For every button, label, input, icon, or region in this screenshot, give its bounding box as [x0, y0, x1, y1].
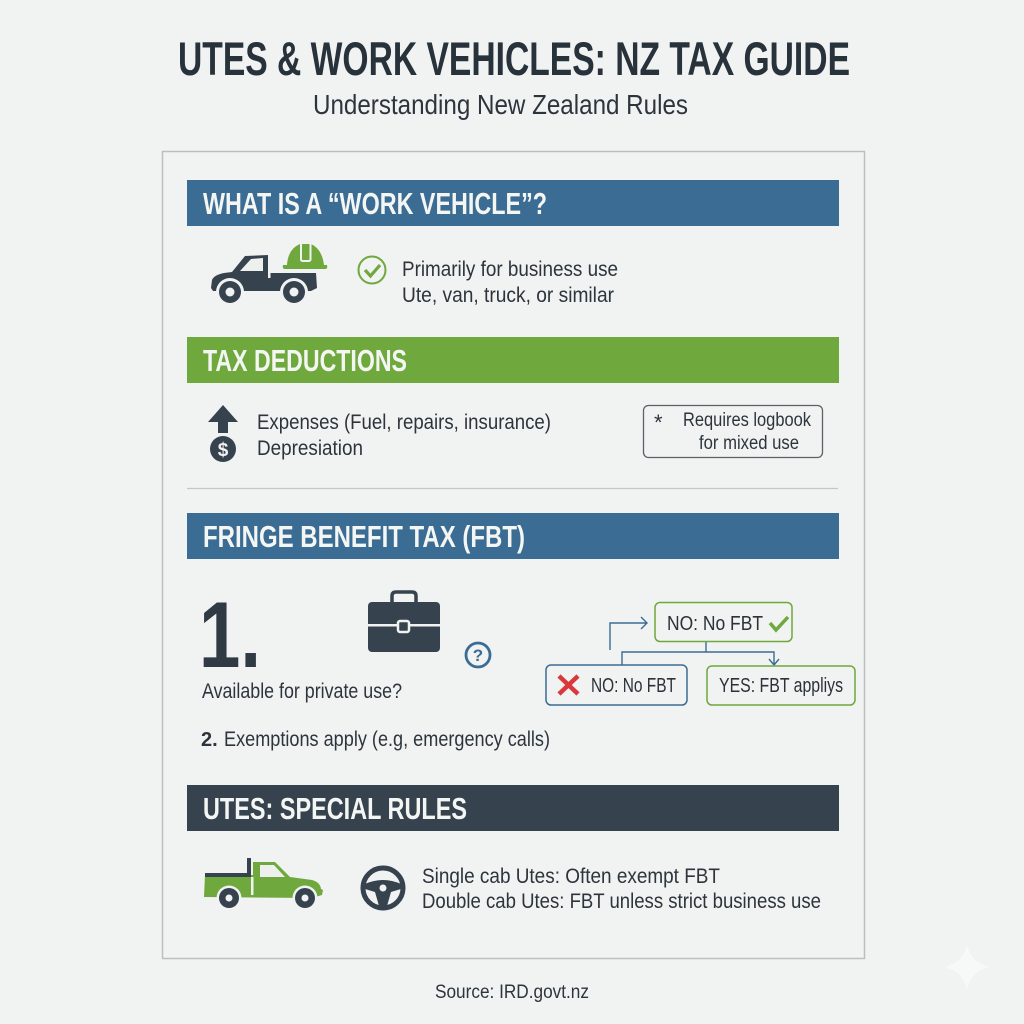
- panel: utes special rules: [187, 785, 839, 913]
- text: work vehicle definition: [402, 258, 618, 307]
- source line: Source: IRD.govt.nz: [435, 982, 589, 1003]
- icon: faint sparkle: [944, 945, 990, 990]
- callout: logbook note: for mixed use: [699, 433, 799, 454]
- heading banner: tax deductions: TAX DEDUCTIONS: [203, 343, 407, 378]
- text: ute rules: [422, 865, 821, 913]
- heading banner: FBT: [187, 513, 839, 559]
- icon: question mark circle: ?: [473, 646, 483, 665]
- icon: work ute with hard hat: [211, 243, 327, 306]
- panel: what is a work vehicle: [187, 180, 839, 307]
- main panel frame: [162, 152, 864, 958]
- callout: logbook note: [644, 406, 822, 458]
- panel: tax deductions: [187, 337, 839, 462]
- heading banner: what is a work vehicle: WHAT IS A “WORK VEHICLE”?: [203, 186, 547, 221]
- icon: green ute: [204, 858, 323, 910]
- flow node: right yes: [707, 666, 855, 705]
- heading banner: what is a work vehicle: [187, 180, 839, 226]
- text: step two exemptions: Exemptions apply (e.g, emergency calls): [224, 728, 550, 751]
- flow connectors: [610, 617, 779, 665]
- heading banner: FBT: FRINGE BENEFIT TAX (FBT): [203, 519, 525, 554]
- flow node: left no: [546, 665, 687, 705]
- icon: arrow up and dollar coin: [208, 405, 238, 462]
- flow node: right yes: YES: FBT appliys: [719, 675, 843, 697]
- panel: fringe benefit tax: [187, 513, 855, 751]
- text: step one question: Available for private use?: [202, 680, 402, 703]
- icon: question mark circle: [466, 643, 490, 667]
- text: step two exemptions: 2.: [201, 729, 218, 751]
- icon: arrow up and dollar coin: $: [218, 440, 229, 461]
- subtitle: Understanding New Zealand Rules: [313, 89, 688, 120]
- heading banner: utes special rules: UTES: SPECIAL RULES: [203, 791, 467, 826]
- callout: logbook note: *: [654, 410, 663, 435]
- flow node: top no: NO: No FBT: [667, 613, 763, 635]
- icon: steering wheel: [363, 868, 403, 908]
- text: deductible items: [257, 411, 551, 460]
- flowchart: FBT decision: [546, 602, 855, 705]
- flow node: top no: [655, 602, 792, 642]
- text: ute rules: Double cab Utes: FBT unless strict business use: [422, 890, 821, 913]
- text: work vehicle definition: Primarily for business use: [402, 258, 618, 281]
- icon: briefcase: [368, 592, 440, 652]
- heading banner: tax deductions: [187, 337, 839, 383]
- text: deductible items: Expenses (Fuel, repairs, insurance): [257, 411, 551, 434]
- heading banner: utes special rules: [187, 785, 839, 831]
- text: work vehicle definition: Ute, van, truck, or similar: [402, 284, 614, 307]
- text: deductible items: Depresiation: [257, 437, 363, 460]
- flow node: left no: NO: No FBT: [591, 675, 676, 697]
- icon: green check circle: [358, 256, 386, 284]
- text: ute rules: Single cab Utes: Often exempt FBT: [422, 865, 720, 888]
- step one number: 1.: [199, 582, 261, 687]
- callout: logbook note: Requires logbook: [683, 410, 811, 431]
